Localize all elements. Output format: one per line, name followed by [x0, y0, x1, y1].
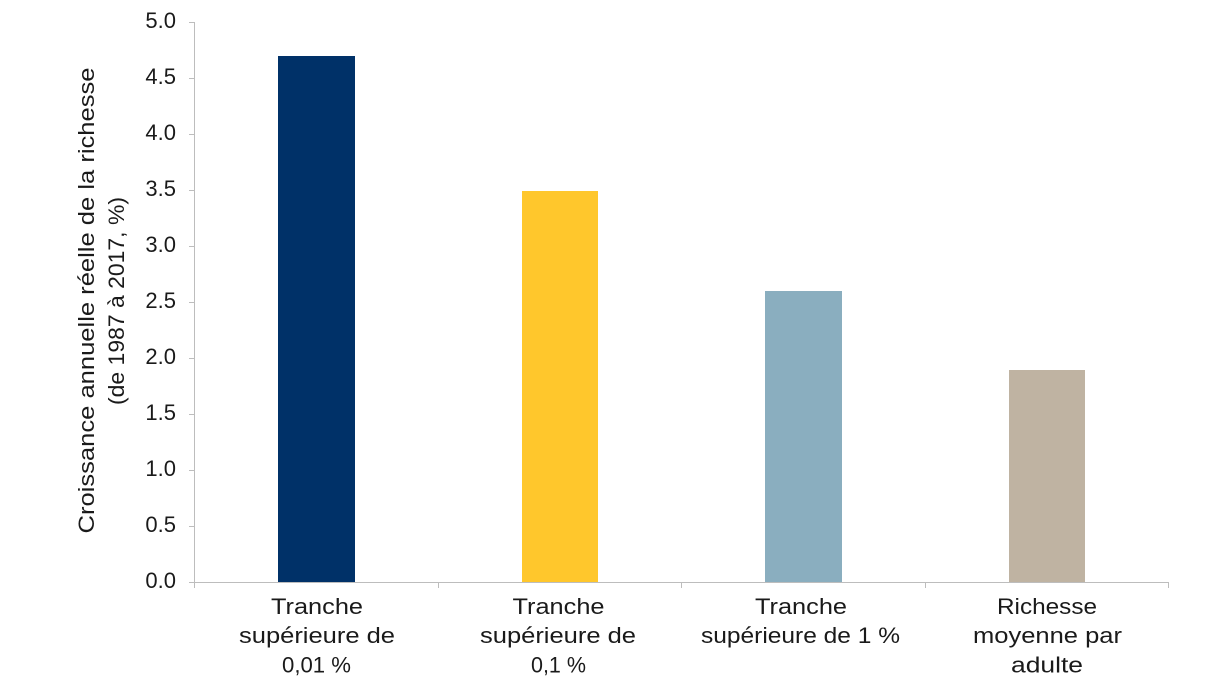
y-axis with tick labels: 0.0 [145, 568, 176, 593]
y-axis with tick labels: 5.0 [145, 8, 176, 33]
x-axis [194, 582, 1168, 588]
category label: tranche supérieure de 1 %: Tranche [755, 594, 847, 619]
category label: richesse moyenne par adulte: moyenne par [973, 623, 1122, 648]
category label: richesse moyenne par adulte [973, 594, 1122, 678]
bar: richesse moyenne par adulte [1009, 370, 1085, 582]
category label: tranche supérieure de 0,1 %: supérieure de [480, 623, 636, 648]
bar: tranche supérieure de 1 % [765, 291, 842, 582]
y-axis title: Croissance annuelle réelle de la richesse [74, 67, 99, 534]
y-axis with tick labels [145, 8, 194, 593]
bar: tranche supérieure de 0,01 % [278, 56, 355, 582]
category label: tranche supérieure de 0,01 %: supérieure de [239, 623, 395, 648]
y-axis with tick labels: 2.5 [145, 288, 176, 313]
bar: tranche supérieure de 0,1 % [522, 191, 598, 582]
y-axis with tick labels: 3.0 [145, 232, 176, 257]
category label: tranche supérieure de 0,1 %: Tranche [512, 594, 604, 619]
category label: tranche supérieure de 0,01 %: 0,01 % [282, 652, 351, 678]
category label: tranche supérieure de 0,01 % [239, 594, 395, 678]
y-axis with tick labels: 0.5 [145, 512, 176, 537]
y-axis title [74, 67, 129, 533]
category label: tranche supérieure de 0,1 %: 0,1 % [531, 652, 586, 678]
y-axis with tick labels: 4.0 [145, 120, 176, 145]
category label: tranche supérieure de 0,01 %: Tranche [271, 594, 363, 619]
y-axis with tick labels: 1.0 [145, 456, 176, 481]
y-axis with tick labels: 3.5 [145, 176, 176, 201]
category label: tranche supérieure de 1 % [701, 594, 900, 648]
y-axis with tick labels: 1.5 [145, 400, 176, 425]
y-axis with tick labels: 2.0 [145, 344, 176, 369]
y-axis with tick labels: 4.5 [145, 64, 176, 89]
category label: richesse moyenne par adulte: Richesse [997, 594, 1097, 619]
category label: tranche supérieure de 0,1 % [480, 594, 636, 678]
y-axis title: (de 1987 à 2017, %) [104, 197, 129, 405]
category label: tranche supérieure de 1 %: supérieure de 1 % [701, 623, 900, 648]
category label: richesse moyenne par adulte: adulte [1011, 652, 1083, 678]
